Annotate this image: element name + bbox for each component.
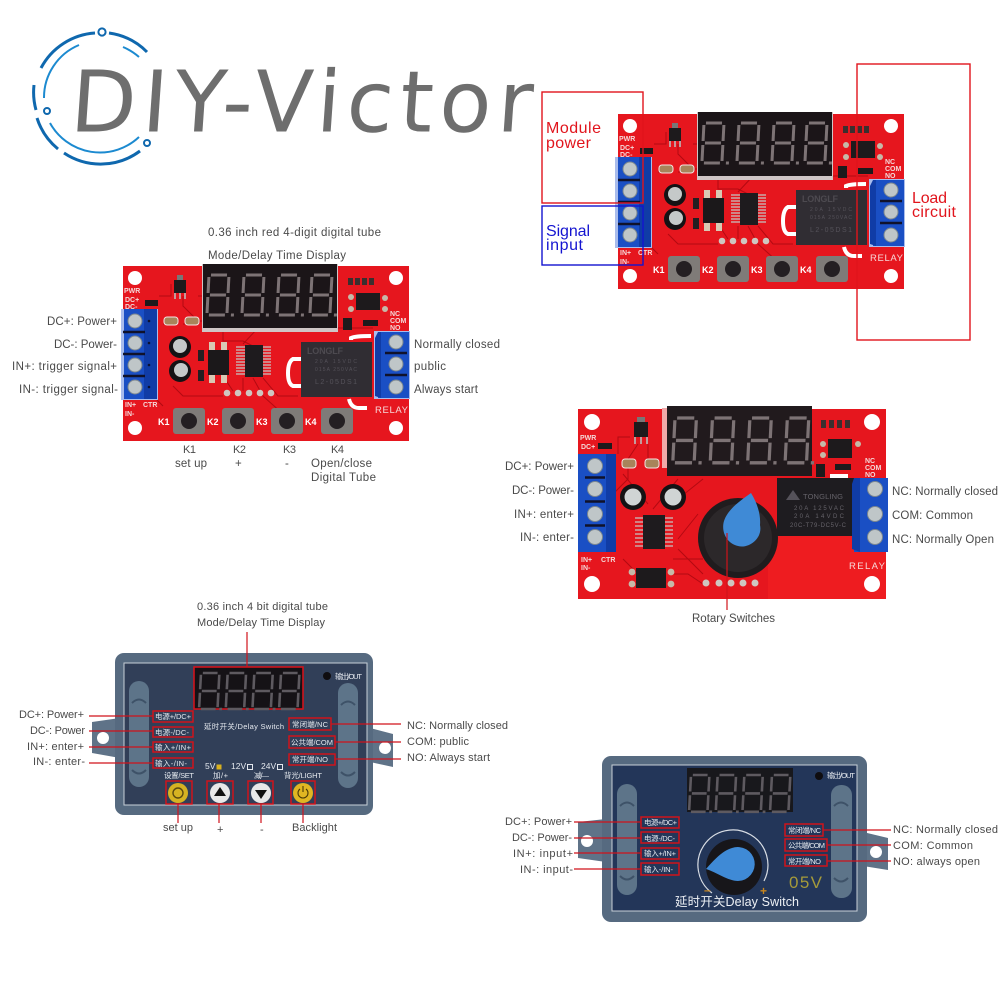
right terminal labels: NC: Normally Open [892, 534, 994, 546]
silk labels: NC [865, 458, 875, 465]
terminal tags left: 电源+/DC+ [644, 817, 678, 827]
terminal tags right: 常闭端/NC [788, 825, 822, 835]
callout box: load circuit [857, 64, 970, 340]
silk labels: IN- [581, 565, 591, 572]
right terminal labels [892, 486, 998, 546]
mounting ears [92, 718, 393, 767]
silk labels: NC [885, 159, 895, 166]
leader lines bottom [178, 804, 303, 823]
display caption: Mode/Delay Time Display [208, 250, 346, 262]
PCB board [615, 112, 905, 289]
terminal tags left: 电源+/DC+ [155, 711, 192, 721]
silk labels: PWR [124, 288, 140, 295]
icon: circular ring logo [34, 28, 150, 164]
output LED [323, 671, 362, 681]
terminal labels right [407, 720, 508, 764]
components [598, 417, 861, 588]
terminal labels right: NC: Normally closed [407, 720, 508, 732]
components [640, 123, 883, 244]
terminal labels left: IN-: input- [520, 864, 573, 876]
panel: rotary red module [505, 406, 998, 625]
button labels: Open/close [311, 458, 372, 470]
knob minus and plus: – [704, 883, 711, 897]
left terminal block [578, 454, 616, 552]
mounting ears [578, 819, 888, 870]
relay: L2-05DS1 [810, 227, 852, 234]
output LED [815, 770, 855, 780]
knob minus and plus: + [760, 884, 767, 898]
output LED: 输出/OUT [335, 671, 362, 681]
leader lines right [823, 830, 891, 861]
relay: 20C-T79-DC5V-C [790, 523, 847, 529]
button captions on faceplate: 减/— [254, 770, 270, 780]
7-segment display [202, 264, 339, 332]
silk labels: NO [865, 472, 876, 479]
05V mark: 05V [789, 873, 823, 892]
delay switch title: 延时开关Delay Switch [675, 895, 799, 909]
silk labels [619, 136, 904, 266]
right terminal labels: NC: Normally closed [892, 486, 998, 498]
relay: 20A 14VDC [794, 514, 845, 520]
terminal tags right: 常开端/NO [788, 856, 821, 866]
callout box: module power: Module [546, 120, 601, 137]
relay [301, 342, 372, 397]
logo wordmark: DIY-Victor [68, 54, 536, 152]
white silk marks [288, 336, 371, 408]
delay switch title: 延时开关/Delay Switch [204, 721, 284, 731]
left terminal labels: DC-: Power- [54, 339, 117, 351]
voltage indicators [205, 761, 282, 771]
7-segment display [697, 112, 834, 180]
PCB board [578, 406, 888, 599]
silk labels: RELAY [375, 405, 409, 416]
left terminal labels: IN-: enter- [520, 532, 574, 544]
push buttons K1-K4: K2 [207, 417, 219, 427]
terminal labels right: COM: public [407, 736, 470, 748]
silk labels: IN- [125, 411, 135, 418]
relay: L2-05DS1 [315, 379, 357, 386]
enclosure body [602, 756, 867, 922]
right terminal block [374, 331, 410, 399]
silk labels: DC+ [620, 145, 634, 152]
terminal labels left [505, 816, 573, 876]
rotary knob [698, 493, 778, 578]
white holes [584, 414, 880, 592]
button labels [163, 822, 337, 836]
enclosure body [115, 653, 373, 815]
caption: Mode/Delay Time Display [197, 617, 326, 629]
silk labels: IN+ [125, 402, 136, 409]
terminal tags right: 常开端/NO [292, 754, 328, 764]
display caption: 0.36 inch red 4-digit digital tube [208, 227, 381, 239]
silk labels: NO [390, 325, 401, 332]
terminal tags left: 输入+/IN+ [155, 742, 192, 752]
silk labels: CTR [601, 557, 615, 564]
button labels: K2 [233, 444, 246, 456]
button labels: - [260, 824, 264, 836]
leader line to display [246, 632, 248, 667]
left terminal labels: IN+: trigger signal+ [12, 361, 117, 373]
terminal tags left: 输入-/IN- [155, 758, 188, 768]
relay: 20A 15VDC [315, 359, 357, 365]
silk labels: COM [885, 166, 902, 173]
caption: 0.36 inch 4 bit digital tube [197, 601, 328, 613]
terminal labels left: DC-: Power [30, 725, 85, 737]
relay [777, 478, 854, 536]
terminal labels left: DC+: Power+ [505, 816, 572, 828]
relay: 20A 125VAC [794, 506, 845, 512]
button labels: Digital Tube [311, 472, 376, 484]
button labels: K1 [183, 444, 196, 456]
left terminal block [615, 157, 652, 248]
button labels: - [285, 458, 289, 470]
terminal tags left [153, 711, 193, 768]
silk labels: NC [390, 311, 400, 318]
caption [197, 601, 328, 629]
left terminal block [121, 309, 158, 400]
silk labels: IN- [620, 259, 630, 266]
terminal labels left: DC+: Power+ [19, 709, 84, 721]
right terminal labels: Always start [414, 384, 479, 396]
push buttons K1-K4: K1 [158, 417, 170, 427]
left terminal labels: DC+: Power+ [47, 316, 117, 328]
leader lines left [89, 716, 153, 763]
push buttons K1-K4 [653, 256, 848, 282]
white holes [623, 119, 898, 283]
terminal labels left [19, 709, 85, 768]
right terminal labels [414, 339, 500, 396]
callout box: signal input [542, 206, 643, 265]
logo: DIY-Victor [34, 28, 536, 164]
silk labels: RELAY [870, 253, 904, 264]
terminal tags right [289, 718, 335, 765]
leader lines right [331, 724, 401, 759]
silk labels: PWR [619, 136, 635, 143]
display caption [208, 227, 381, 262]
terminal labels left: IN+: enter+ [27, 741, 84, 753]
push buttons K1-K4 [158, 408, 353, 434]
silk labels: DC+ [125, 297, 139, 304]
left terminal labels [12, 316, 118, 396]
relay: LONGLF [307, 346, 344, 356]
voltage indicators: 24V [261, 761, 276, 771]
terminal labels left: DC-: Power- [512, 832, 572, 844]
relay: LONGLF [802, 194, 838, 204]
terminal tags left: 电源-/DC- [155, 727, 190, 737]
right terminal block [852, 478, 888, 552]
terminal labels right: NO: Always start [407, 752, 490, 764]
button captions on faceplate: 设置/SET [164, 770, 194, 780]
button labels: + [217, 824, 223, 836]
panel: red module with button labels [12, 227, 500, 484]
components [145, 275, 388, 396]
leader lines left [574, 822, 641, 869]
button labels: K4 [331, 444, 344, 456]
silk labels: COM [390, 318, 406, 325]
button captions on faceplate: 加/+ [213, 770, 229, 780]
silk labels: DC- [620, 152, 633, 159]
relay: 015A 250VAC [810, 215, 852, 221]
relay: TONGLING [803, 492, 843, 501]
digital display [687, 768, 793, 812]
callout box: module power: power [546, 135, 592, 152]
push buttons K1-K4: K4 [305, 417, 317, 427]
button labels: Backlight [292, 822, 337, 834]
push buttons K1-K4: K3 [256, 417, 268, 427]
silk labels: IN+ [581, 557, 592, 564]
right terminal labels: Normally closed [414, 339, 500, 351]
voltage indicators: 12V [231, 761, 246, 771]
panel: blue rotary enclosure [505, 756, 998, 922]
silk labels: DC- [125, 304, 138, 311]
digital display [194, 667, 303, 709]
left terminal labels: DC-: Power- [512, 485, 574, 497]
terminal tags right: 公共端/COM [291, 737, 333, 747]
silk labels: PWR [580, 435, 596, 442]
terminal tags right: 公共端/COM [788, 840, 825, 850]
terminal tags left [641, 817, 679, 875]
terminal labels right: NO: always open [893, 856, 980, 868]
callout box: signal input: input [546, 237, 584, 254]
callout box: signal input: Signal [546, 223, 590, 240]
terminal labels right: COM: Common [893, 840, 973, 852]
terminal labels right [893, 824, 998, 868]
silk labels [580, 435, 886, 572]
terminal labels left: IN+: input+ [513, 848, 573, 860]
button labels: set up [163, 822, 193, 834]
callout box: load circuit: circuit [912, 204, 957, 221]
silk labels: DC+ [581, 444, 595, 451]
7-segment display [662, 406, 816, 476]
right terminal block [869, 179, 905, 247]
left terminal labels [505, 461, 574, 544]
output LED: 输出/OUT [827, 770, 855, 780]
callout box: module power [542, 92, 643, 203]
faceplate [612, 765, 857, 911]
rotary knob [698, 830, 768, 895]
left terminal labels: IN+: enter+ [514, 509, 574, 521]
terminal labels left: IN-: enter- [33, 756, 85, 768]
side slots [129, 681, 358, 788]
voltage indicators: 5V [205, 761, 216, 771]
silk labels [124, 288, 409, 418]
side slots [617, 784, 852, 898]
faceplate [124, 663, 367, 805]
white silk marks [783, 184, 866, 256]
button labels: K3 [283, 444, 296, 456]
rotary label: Rotary Switches [692, 613, 775, 625]
silk labels: IN+ [620, 250, 631, 257]
terminal labels right: NC: Normally closed [893, 824, 998, 836]
terminal tags right [785, 824, 827, 866]
right terminal labels: public [414, 361, 446, 373]
terminal tags left: 输入+/IN+ [644, 848, 677, 858]
right terminal labels: COM: Common [892, 510, 973, 522]
PCB board [121, 264, 410, 441]
buttons [166, 781, 315, 804]
button labels [175, 444, 376, 484]
silk labels: NO [885, 173, 896, 180]
white holes [128, 271, 403, 435]
callout box: load circuit: Load [912, 190, 947, 207]
panel: blue button enclosure [19, 601, 508, 836]
silk labels: CTR [638, 250, 652, 257]
knob minus and plus [704, 883, 767, 898]
relay: 015A 250VAC [315, 367, 357, 373]
button labels: set up [175, 458, 207, 470]
panel: red module wiring (top right) [542, 64, 970, 340]
push buttons K1-K4: K3 [751, 265, 763, 275]
terminal tags left: 电源-/DC- [644, 833, 676, 843]
push buttons K1-K4: K1 [653, 265, 665, 275]
button captions on faceplate: 背光/LIGHT [284, 770, 322, 780]
silk labels: RELAY [849, 561, 886, 572]
terminal tags right: 常闭端/NC [292, 719, 329, 729]
relay [796, 190, 867, 245]
push buttons K1-K4: K2 [702, 265, 714, 275]
left terminal labels: IN-: trigger signal- [19, 384, 118, 396]
terminal tags left: 输入-/IN- [644, 864, 674, 874]
silk labels: CTR [143, 402, 157, 409]
button captions on faceplate [164, 770, 322, 780]
push buttons K1-K4: K4 [800, 265, 812, 275]
button labels: + [235, 458, 242, 470]
left terminal labels: DC+: Power+ [505, 461, 574, 473]
callout line: rotary switch [726, 533, 728, 610]
silk labels: COM [865, 465, 882, 472]
relay: 20A 15VDC [810, 207, 852, 213]
